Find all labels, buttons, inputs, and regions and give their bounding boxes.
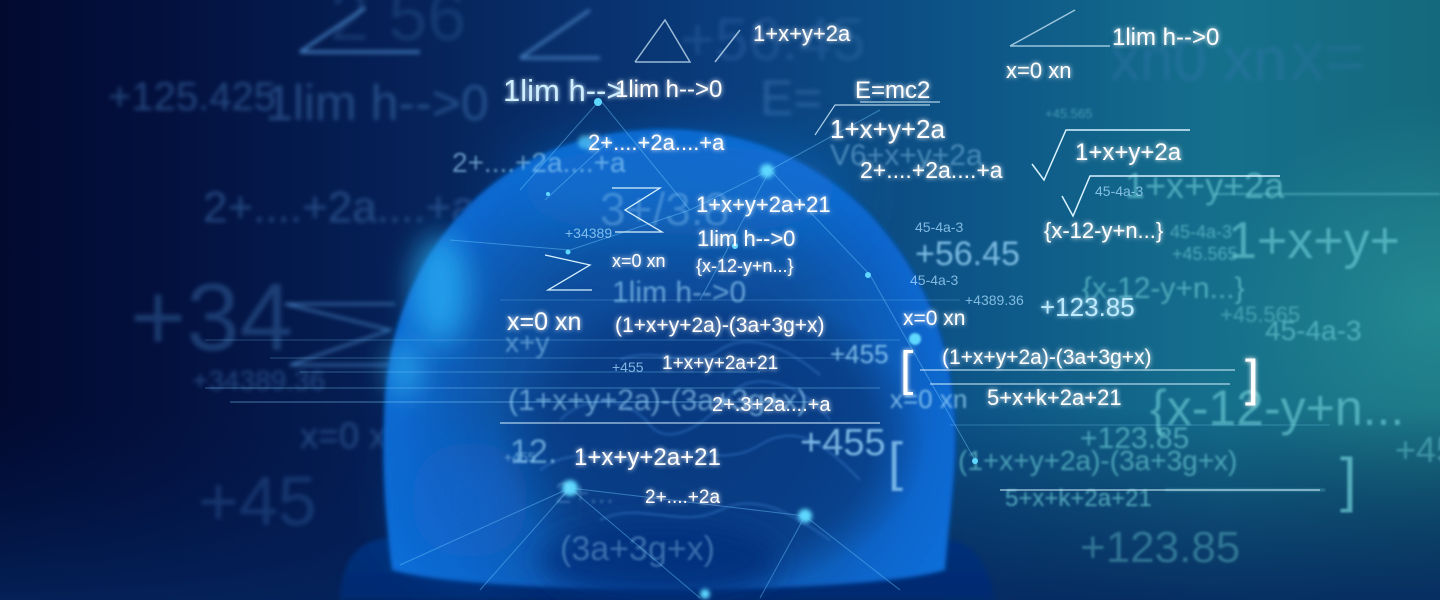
crisp white formulas: (1+x+y+2a)-(3a+3g+x) bbox=[615, 314, 825, 337]
head silhouette bbox=[340, 130, 994, 600]
mid formulas on the head: (1+x+y+2a)-(3a+3g+x) bbox=[508, 384, 807, 417]
background formulas, faint and blurred: 2+....+2a....+a bbox=[203, 183, 476, 232]
crisp white formulas: x=0 xn bbox=[1006, 58, 1071, 83]
small annotations: 45-4a-3 bbox=[915, 219, 963, 235]
crisp white formulas: 1+x+y+2a bbox=[753, 21, 851, 46]
crisp white formulas: {x-12-y+n...} bbox=[1044, 218, 1163, 243]
mid formulas on the head bbox=[452, 139, 1020, 568]
horizontal light streaks bbox=[205, 300, 1330, 425]
crisp white formulas: 5+x+k+2a+21 bbox=[987, 385, 1122, 410]
crisp white formulas: 2+....+2a....+a bbox=[860, 157, 1003, 183]
network lines and nodes bbox=[400, 100, 975, 598]
background formulas, faint and blurred: xn0 xn bbox=[1110, 26, 1287, 93]
crisp white formulas: 1lim h-->0 bbox=[1112, 24, 1219, 51]
crisp white formulas: 1lim h-->0 bbox=[615, 76, 722, 103]
crisp white formulas: 1+x+y+2a bbox=[830, 114, 945, 144]
mid formulas on the head: x+y bbox=[505, 327, 549, 358]
crisp white formulas: 2+.3+2a....+a bbox=[712, 394, 831, 416]
small annotations: +455 bbox=[612, 359, 644, 375]
mid formulas on the head: +455 bbox=[830, 339, 889, 369]
crisp white formulas bbox=[503, 21, 1259, 508]
large teal formulas on the right: 5+x+k+2a+21 bbox=[1005, 485, 1152, 512]
small annotations bbox=[565, 183, 1143, 375]
background formulas, faint and blurred: +56.45 bbox=[680, 6, 865, 73]
background formulas, faint and blurred: x=0 xn bbox=[300, 415, 407, 456]
crisp white formulas: {x-12-y+n...} bbox=[696, 256, 794, 276]
crisp white formulas: ] bbox=[1245, 350, 1259, 406]
mid formulas on the head: V6+x+y+2a bbox=[830, 139, 983, 172]
mid formulas on the head: 3+/3.8 bbox=[600, 183, 729, 235]
background formulas, faint and blurred: 1lim h-->0 bbox=[265, 75, 489, 131]
background formulas, faint and blurred: +125.425 bbox=[108, 75, 276, 119]
small annotations: +4389.36 bbox=[965, 292, 1024, 308]
crisp white formulas: +123.85 bbox=[1040, 292, 1135, 322]
background formulas, faint and blurred: +34389.36 bbox=[192, 365, 325, 396]
crisp white formulas: x=0 xn bbox=[612, 251, 666, 271]
background formulas, faint and blurred: E= bbox=[760, 70, 823, 126]
mid formulas on the head: +56.45 bbox=[915, 235, 1020, 273]
mid formulas on the head: 2+....+2a....+a bbox=[452, 147, 626, 178]
background formulas, faint and blurred: +34 bbox=[130, 264, 293, 371]
crisp white formulas: 1+x+y+2a bbox=[1075, 139, 1182, 166]
large teal formulas on the right: {x-12-y+n... bbox=[1150, 380, 1404, 436]
crisp white formulas: 1lim h--> bbox=[503, 73, 624, 108]
large teal formulas on the right: 45-4a-3 bbox=[1170, 222, 1232, 242]
large teal formulas on the right: 45-4a-3 bbox=[1265, 315, 1362, 346]
large teal formulas on the right bbox=[958, 106, 1440, 572]
crisp white formulas: 1lim h-->0 bbox=[697, 226, 795, 251]
large teal formulas on the right: {x-12-y+n...} bbox=[1082, 272, 1245, 305]
crisp white formulas: 1+x+y+2a+21 bbox=[574, 444, 721, 471]
large teal formulas on the right: 1+x+y+2a bbox=[1125, 165, 1285, 206]
mid formulas on the head: 12. bbox=[510, 433, 557, 471]
mid formulas on the head: [ bbox=[888, 432, 903, 492]
large teal formulas on the right: 1+x+y+ bbox=[1228, 212, 1400, 270]
crisp white formulas: x=0 xn bbox=[903, 307, 965, 330]
mid formulas on the head: 2+... bbox=[555, 477, 614, 510]
crisp white formulas: x=0 xn bbox=[507, 308, 581, 336]
crisp white formulas: 2+....+2a....+a bbox=[588, 130, 725, 155]
large teal formulas on the right: ] bbox=[1340, 446, 1357, 513]
large teal formulas on the right: +45.565 bbox=[1172, 244, 1238, 264]
small annotations: 45-4a-3 bbox=[910, 272, 958, 288]
mid formulas on the head: +455 bbox=[800, 422, 886, 464]
mid formulas on the head: x=0 xn bbox=[890, 384, 967, 414]
crisp white formulas: 1+x+y+2a+21 bbox=[696, 192, 831, 217]
background formulas, faint and blurred: +45 bbox=[198, 462, 317, 540]
large teal formulas on the right: (1+x+y+2a)-(3a+3g+x) bbox=[958, 445, 1237, 476]
large teal formulas on the right: +45.565 bbox=[1045, 106, 1092, 121]
crisp white formulas: E=mc2 bbox=[855, 77, 930, 104]
brain folds bbox=[540, 342, 860, 540]
large teal formulas on the right: +123.85 bbox=[1080, 523, 1240, 572]
math symbols, root signs and rules bbox=[500, 10, 1320, 490]
mid formulas on the head: (3a+3g+x) bbox=[560, 530, 715, 568]
large teal formulas on the right: +45.565 bbox=[1220, 302, 1300, 327]
crisp white formulas: 1+x+y+2a+21 bbox=[662, 353, 778, 374]
crisp white formulas: [ bbox=[900, 343, 913, 396]
small annotations: 45-4a-3 bbox=[1095, 183, 1143, 199]
small annotations: +34389 bbox=[565, 225, 612, 241]
mid formulas on the head: +455 bbox=[504, 449, 536, 465]
large teal formulas on the right: +123.85 bbox=[1080, 422, 1189, 455]
background formulas, faint and blurred bbox=[108, 0, 1366, 540]
background formulas, faint and blurred: x= bbox=[1290, 17, 1366, 95]
crisp white formulas: (1+x+y+2a)-(3a+3g+x) bbox=[942, 346, 1152, 369]
crisp white formulas: 2+....+2a bbox=[645, 487, 720, 508]
mid formulas on the head: 1lim h-->0 bbox=[612, 276, 746, 309]
